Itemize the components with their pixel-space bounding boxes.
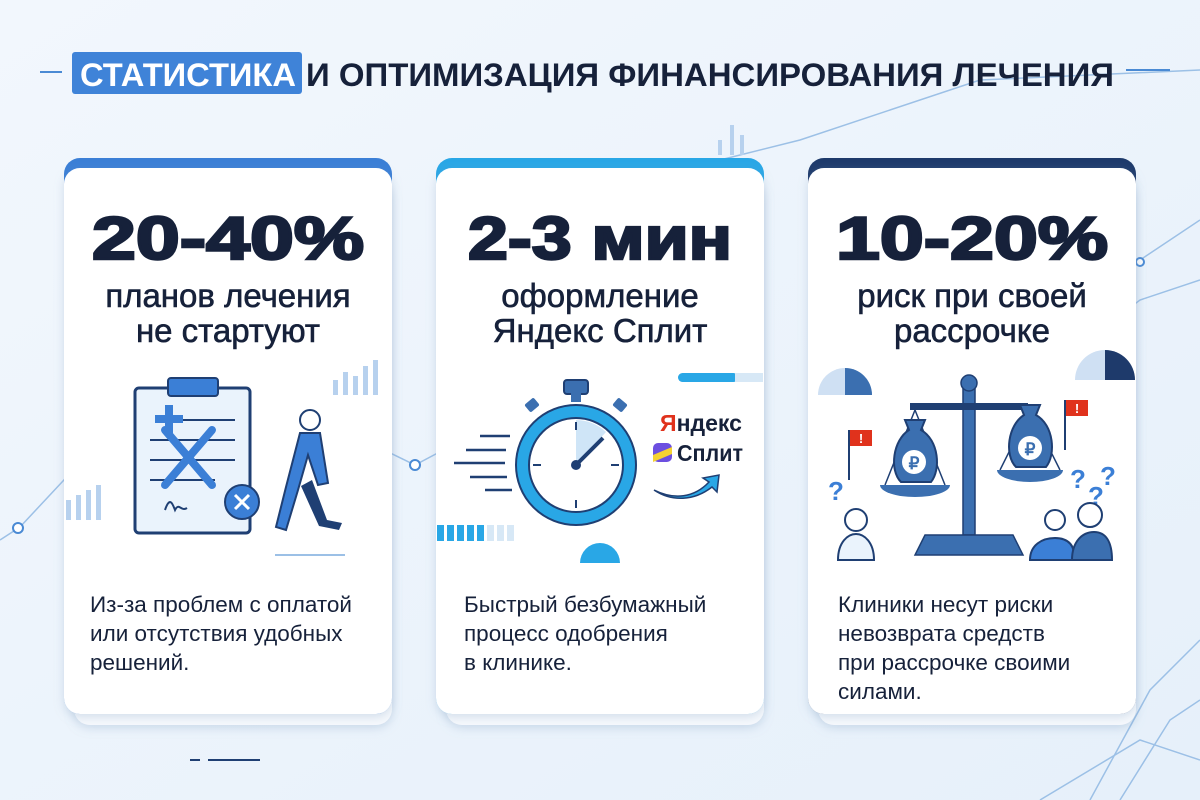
title: И ОПТИМИЗАЦИЯ ФИНАНСИРОВАНИЯ ЛЕЧЕНИЯ <box>306 57 1114 93</box>
stat caption: Яндекс Сплит <box>493 312 707 349</box>
stat caption <box>105 277 351 349</box>
body text: в клинике. <box>464 650 572 675</box>
logo: Yandex Split: Сплит <box>677 440 743 466</box>
body text: силами. <box>838 679 922 704</box>
stat caption: рассрочке <box>894 312 1050 349</box>
stat caption: риск при своей <box>857 277 1087 314</box>
body text: процесс одобрения <box>464 621 668 646</box>
icon: scales with money bags: ? <box>1100 461 1116 491</box>
body text <box>90 592 352 675</box>
stat caption: планов лечения <box>105 277 351 314</box>
arrow <box>654 475 719 498</box>
panel: Yandex Split <box>436 158 764 725</box>
body text: невозврата средств <box>838 621 1045 646</box>
logo: Yandex Split: Яндекс <box>660 410 742 436</box>
icon: scales with money bags: ₽ <box>1025 440 1036 459</box>
icon: scales with money bags: ? <box>828 476 844 506</box>
body text: Клиники несут риски <box>838 592 1053 617</box>
stat number: 10-20% <box>836 205 1108 272</box>
icon: scales with money bags: ? <box>1088 481 1104 511</box>
title <box>40 52 1170 94</box>
icon: scales with money bags: ! <box>1075 401 1079 416</box>
icon: scales with money bags <box>828 375 1116 560</box>
body text: при рассрочке своими <box>838 650 1070 675</box>
body text: или отсутствия удобных <box>90 621 343 646</box>
logo: Yandex Split <box>653 410 743 466</box>
stat number: 20-40% <box>92 205 364 272</box>
icon: scales with money bags: ? <box>1070 464 1086 494</box>
body text: Быстрый безбумажный <box>464 592 706 617</box>
stat caption: не стартуют <box>136 312 320 349</box>
icon: clipboard with walking man <box>135 378 345 555</box>
stat number: 2-3 мин <box>468 205 732 272</box>
body text: решений. <box>90 650 189 675</box>
stat caption: оформление <box>501 277 699 314</box>
body text <box>838 592 1070 704</box>
panel: plans not starting <box>64 158 392 725</box>
stat caption <box>857 277 1087 349</box>
body text: Из-за проблем с оплатой <box>90 592 352 617</box>
title: СТАТИСТИКА <box>80 57 296 93</box>
icon: scales with money bags: ! <box>859 431 863 446</box>
icon: stopwatch <box>454 380 636 525</box>
body text <box>464 592 706 675</box>
icon: scales with money bags: ₽ <box>909 454 920 473</box>
stat caption <box>493 277 707 349</box>
panel: own installment risk <box>808 158 1136 725</box>
